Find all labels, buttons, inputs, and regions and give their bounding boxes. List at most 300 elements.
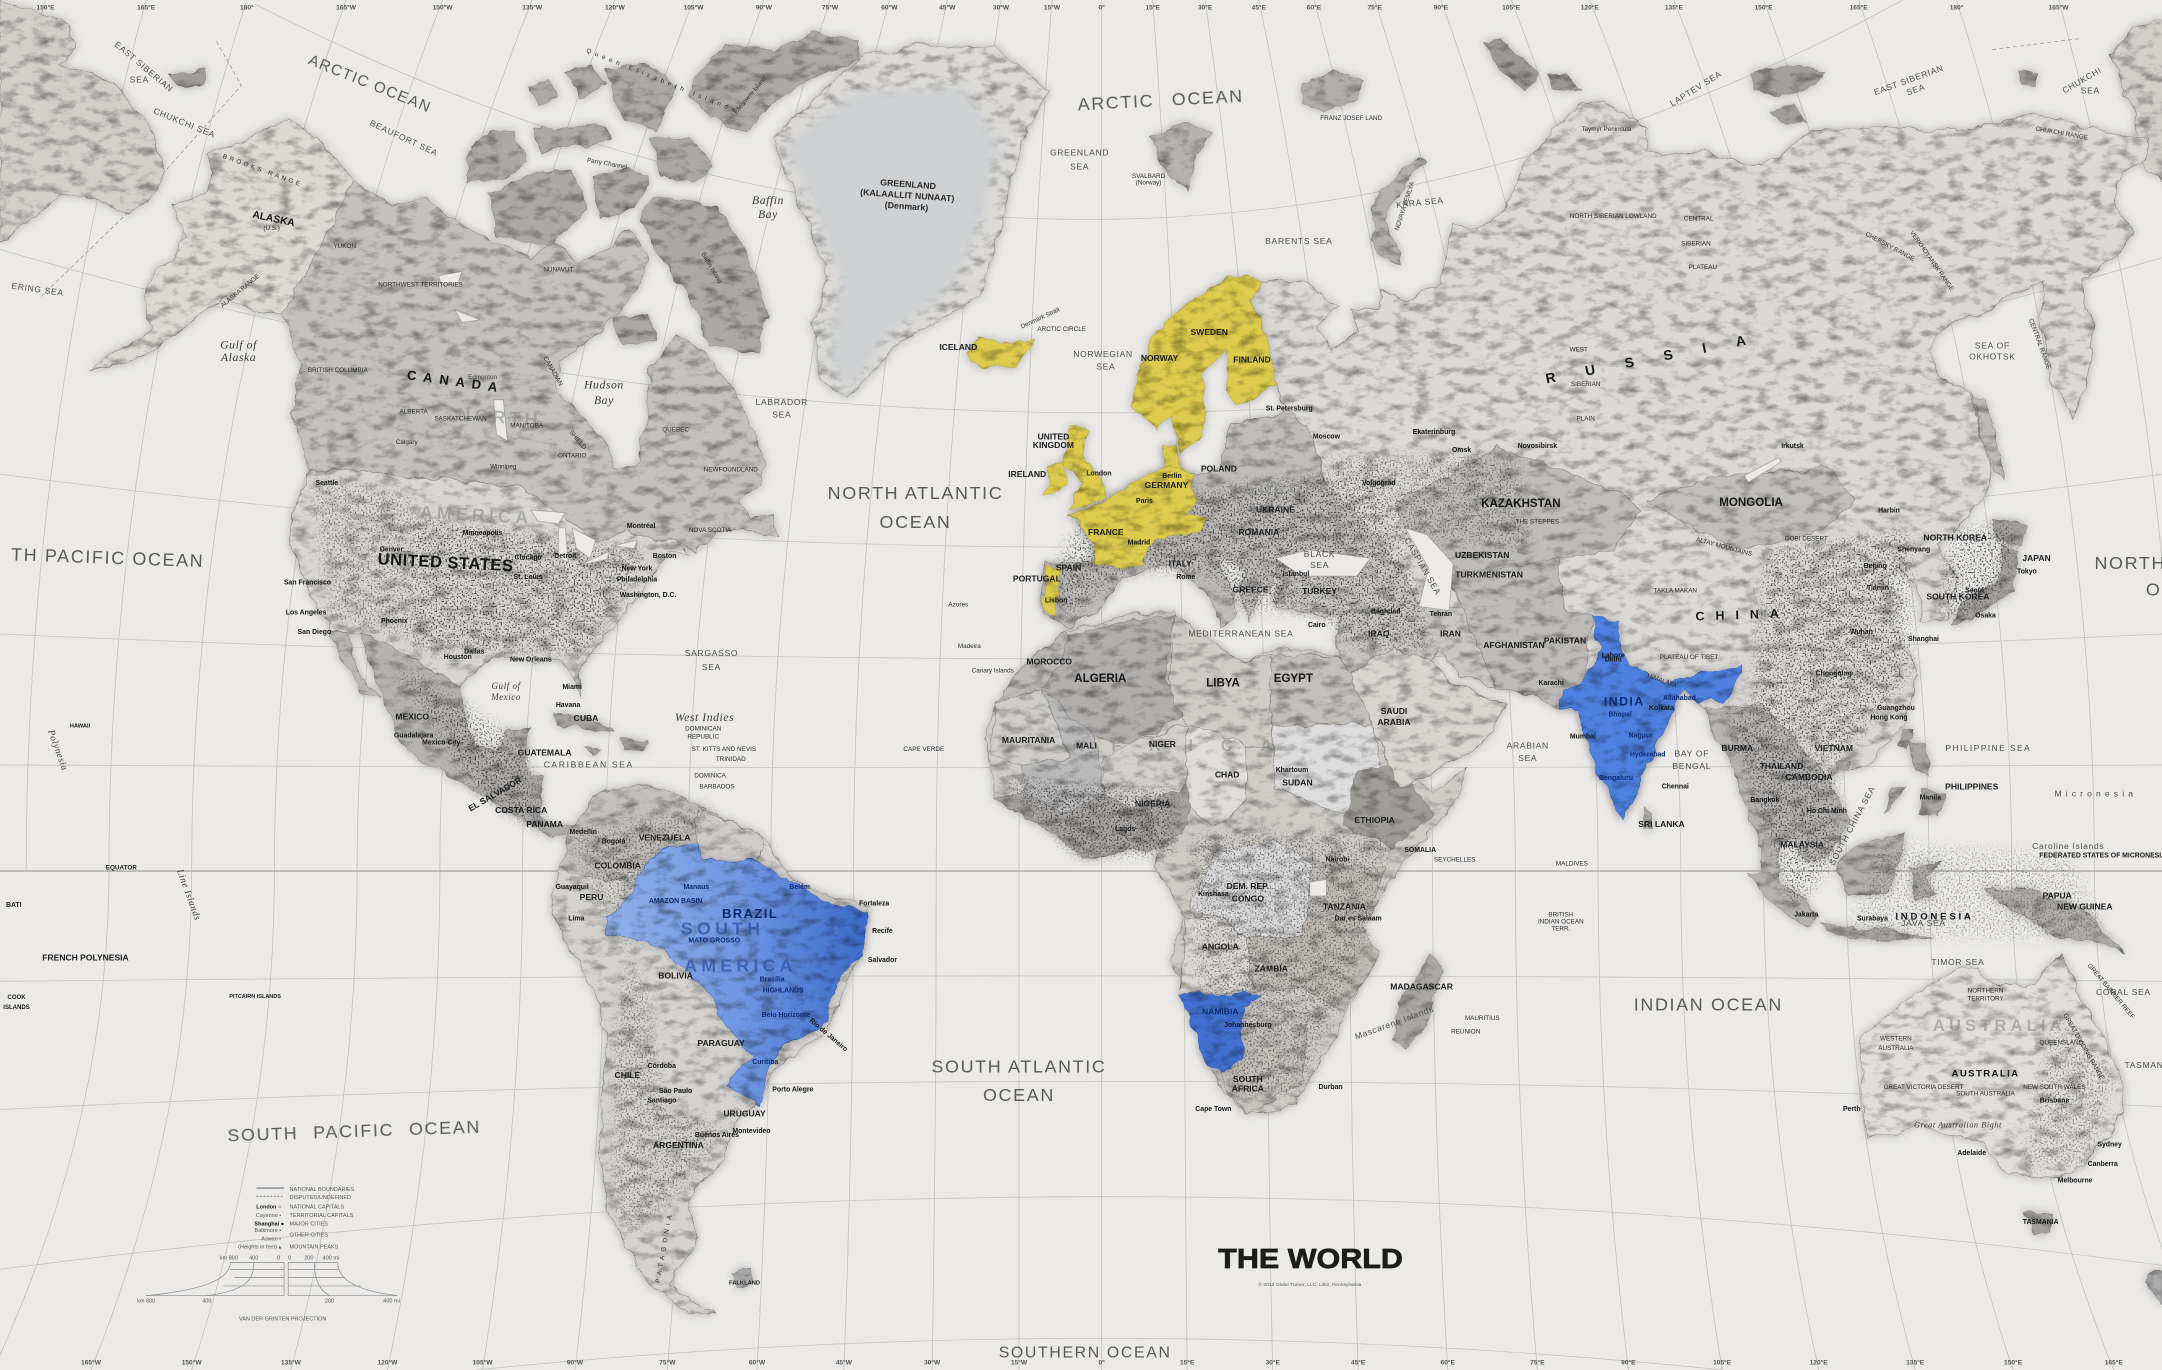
copyright: © 2012 Globe Turner, LLC, Lititz, Pennsylvania xyxy=(1258,1281,1362,1288)
country labels: FINLAND xyxy=(1233,354,1271,364)
city and regional labels: Kolkata xyxy=(1649,705,1674,712)
Black Sea xyxy=(1275,550,1371,576)
Somerset and Prince of Wales xyxy=(593,168,648,221)
country labels: NORWAY xyxy=(1141,353,1179,363)
country labels: COLOMBIA xyxy=(594,860,641,870)
top longitude labels: 15°W xyxy=(1044,4,1061,12)
city and regional labels: WESTERN xyxy=(1880,1036,1912,1043)
West Africa xyxy=(993,786,1189,860)
city and regional labels: Tianjin xyxy=(1867,585,1889,592)
Tasmania xyxy=(2027,1213,2054,1235)
Banks Island xyxy=(466,131,527,182)
city and regional labels: London xyxy=(1086,471,1112,478)
city and regional labels: Chennai xyxy=(1662,783,1689,790)
bottom longitude labels: 0° xyxy=(1099,1358,1105,1366)
bottom longitude labels: 75°W xyxy=(659,1358,676,1366)
city and regional labels: Rome xyxy=(1176,574,1196,581)
bottom longitude labels: 150°W xyxy=(182,1358,202,1366)
country labels: MEXICO xyxy=(395,711,429,721)
city and regional labels: AUSTRALIA xyxy=(1878,1045,1914,1052)
city and regional labels: Wuhan xyxy=(1850,629,1873,636)
continent ghost labels: SOUTH xyxy=(681,918,764,938)
top longitude labels: 60°W xyxy=(881,4,898,12)
city and regional labels: Perth xyxy=(1843,1106,1861,1113)
Greenland label: (Denmark) xyxy=(884,200,929,213)
city and regional labels: Salvador xyxy=(868,957,897,964)
Southeast Asia xyxy=(1703,703,1850,926)
city and regional labels: Ekaterinburg xyxy=(1413,429,1455,436)
ocean labels: O xyxy=(2146,579,2162,599)
continent ghost labels xyxy=(419,404,2066,1035)
bottom longitude labels: 120°W xyxy=(377,1358,398,1366)
legend entries: (Heights in feet) ▴ xyxy=(238,1245,282,1251)
legend entries: MOUNTAIN PEAKS xyxy=(290,1245,339,1251)
city and regional labels: Baffin Island xyxy=(700,251,723,285)
city and regional labels: Moscow xyxy=(1313,433,1341,440)
city and regional labels: HIMALAYA xyxy=(1646,672,1679,690)
country labels: HAWAII xyxy=(70,724,91,730)
city and regional labels: Mexico City xyxy=(422,739,461,746)
top longitude labels: 150°W xyxy=(433,4,453,12)
country labels: SUDAN xyxy=(1282,778,1313,788)
city and regional labels: Bengaluru xyxy=(1599,775,1633,782)
Chad xyxy=(1186,724,1248,827)
country labels: ROMANIA xyxy=(1238,527,1279,537)
Canada xyxy=(283,183,779,554)
country labels: (U.S.) xyxy=(263,225,280,232)
France, Germany, Benelux, Austria xyxy=(1069,463,1211,568)
Sumatra xyxy=(1750,874,1820,926)
Sulawesi xyxy=(1908,861,1944,899)
city and regional labels: Chicago xyxy=(515,555,542,562)
city and regional labels: Montevideo xyxy=(732,1128,771,1135)
Denmark xyxy=(1162,444,1180,469)
city and regional labels: Medellín xyxy=(569,829,597,836)
city and regional labels: Chongqing xyxy=(1816,670,1852,677)
country labels: THAILAND xyxy=(1760,761,1803,771)
country labels: NIGERIA xyxy=(1135,798,1170,808)
city and regional labels: HIGHLANDS xyxy=(763,987,804,994)
seas and bays: BAY OF xyxy=(1674,749,1709,759)
city and regional labels: ST. KITTS AND NEVIS xyxy=(692,746,756,753)
city and regional labels: PLAIN xyxy=(1577,415,1595,422)
country labels: IRAN xyxy=(1440,629,1461,639)
seas and bays: CORAL SEA xyxy=(2096,987,2151,997)
scale chart xyxy=(146,1262,397,1296)
title: THE WORLD xyxy=(1218,1243,1403,1274)
country labels: IRAQ xyxy=(1368,629,1390,639)
country labels: BATI xyxy=(6,902,22,909)
city and regional labels: GREAT VICTORIA DESERT xyxy=(1884,1084,1963,1091)
Scandinavia: Norway, Sweden, Finland xyxy=(1132,276,1277,453)
Queen Elizabeth Islands xyxy=(527,62,714,182)
city and regional labels: FRANZ JOSEF LAND xyxy=(1320,115,1383,122)
city and regional labels: CHERSKY RANGE xyxy=(1864,231,1916,263)
city and regional labels: Novosibirsk xyxy=(1518,443,1557,450)
scale labels xyxy=(137,1256,400,1322)
bottom longitude labels xyxy=(81,1358,2123,1366)
country labels: ALASKA xyxy=(251,210,296,229)
South Africa xyxy=(1219,1013,1310,1116)
city and regional labels: MATO GROSSO xyxy=(688,938,741,945)
city and regional labels: SASKATCHEWAN xyxy=(434,415,487,422)
scale labels: 400 xyxy=(249,1256,258,1262)
city and regional labels: Melbourne xyxy=(2058,1178,2093,1185)
city and regional labels: Fortaleza xyxy=(859,901,889,908)
city and regional labels: Tokyo xyxy=(2017,568,2037,575)
city and regional labels: Dar es Salaam xyxy=(1335,916,1382,923)
city and regional labels: ALTAY MOUNTAINS xyxy=(1695,536,1753,558)
city and regional labels: SOUTH AUSTRALIA xyxy=(1956,1091,2016,1098)
legend entries: Shanghai ● xyxy=(254,1221,284,1227)
scale labels: km 800 xyxy=(137,1298,155,1304)
highlighted countries: yellow group xyxy=(967,276,1277,615)
country labels: MADAGASCAR xyxy=(1390,982,1453,992)
city and regional labels: Manaus xyxy=(684,884,709,891)
country labels: JAPAN xyxy=(2022,553,2051,563)
city and regional labels: Nagpur xyxy=(1629,732,1653,739)
country labels: TURKMENISTAN xyxy=(1455,569,1523,579)
Japan xyxy=(1951,517,2027,623)
country labels: TANZANIA xyxy=(1323,902,1366,912)
city and regional labels: Delhi xyxy=(1605,657,1622,664)
city and regional labels: Khartoum xyxy=(1276,767,1308,774)
city and regional labels: ARCTIC CIRCLE xyxy=(1037,326,1086,333)
seas and bays: GREENLAND xyxy=(1050,148,1109,158)
scale labels: 400 mi xyxy=(323,1256,339,1262)
city and regional labels: Surabaya xyxy=(1857,916,1888,923)
city and regional labels: Ellesmere Island xyxy=(733,75,768,116)
city and regional labels: Detroit xyxy=(554,553,577,560)
city and regional labels: Winnipeg xyxy=(490,464,517,471)
city and regional labels: Montréal xyxy=(627,523,656,530)
country labels: SOMALIA xyxy=(1404,847,1436,854)
seas and bays: Line Islands xyxy=(174,867,203,922)
Greenland coast xyxy=(772,44,1048,400)
Greenland label xyxy=(859,176,956,215)
seas and bays: LAPTEV SEA xyxy=(1668,69,1723,108)
Mongolia xyxy=(1648,469,1855,549)
top longitude labels: 165°W xyxy=(336,4,357,12)
city and regional labels: Shenyang xyxy=(1897,546,1930,553)
top longitude labels: 120°E xyxy=(1581,4,1599,12)
Mexico xyxy=(361,637,531,788)
city and regional labels: Karachi xyxy=(1539,680,1564,687)
city and regional labels: Madrid xyxy=(1128,539,1150,546)
India xyxy=(1558,616,1744,823)
Falkland Islands xyxy=(731,1271,756,1286)
city and regional labels: Harbin xyxy=(1878,508,1900,515)
city and regional labels: ALBERTA xyxy=(400,408,429,415)
city and regional labels: New Orleans xyxy=(510,657,552,664)
legend entries: OTHER CITIES xyxy=(290,1232,328,1238)
country labels: NIGER xyxy=(1149,739,1176,749)
city and regional labels: INDIAN OCEAN xyxy=(1538,918,1584,925)
country labels: NEW GUINEA xyxy=(2057,902,2113,912)
city and regional labels: YUKON xyxy=(333,243,356,250)
Ellesmere Island xyxy=(689,34,862,132)
seas and bays: KARA SEA xyxy=(1396,195,1444,210)
bottom longitude labels: 90°E xyxy=(1621,1358,1636,1366)
city and regional labels: Lahore xyxy=(1602,652,1625,659)
city and regional labels: TRINIDAD xyxy=(716,756,746,763)
Severnaya Zemlya xyxy=(1484,39,1580,94)
Ireland xyxy=(1044,462,1066,496)
country labels: ICELAND xyxy=(939,342,977,352)
bottom longitude labels: 15°W xyxy=(1011,1358,1028,1366)
continent ghost labels: AMERICA xyxy=(684,956,797,976)
city and regional labels: Guayaquil xyxy=(556,884,589,891)
city and regional labels: GREAT DIVIDING RANGE xyxy=(2061,1012,2105,1081)
seas and bays: Gulf of xyxy=(220,339,258,352)
Libya xyxy=(1169,613,1271,751)
country labels: BRAZIL xyxy=(722,906,778,921)
country labels: SOUTH xyxy=(1233,1074,1263,1084)
city and regional labels: Belém xyxy=(789,884,810,891)
city and regional labels: Lisbon xyxy=(1045,597,1067,604)
city and regional labels: Guadalajara xyxy=(394,732,434,739)
city and regional labels: QUÉBEC xyxy=(662,424,689,433)
Sakhalin xyxy=(1972,393,2005,482)
city and regional labels: Dallas xyxy=(464,648,485,655)
country labels: NAMIBIA xyxy=(1202,1006,1239,1016)
scale labels: km 800 xyxy=(220,1256,238,1262)
country labels: AUSTRALIA xyxy=(1951,1068,2020,1079)
city and regional labels: Córdoba xyxy=(648,1063,676,1070)
New Zealand edge xyxy=(2144,1261,2162,1309)
city and regional labels: Bogotá xyxy=(602,839,626,846)
seas and bays: SEA xyxy=(702,662,721,672)
country labels: KINGDOM xyxy=(1033,440,1074,450)
city and regional labels: Curitiba xyxy=(752,1059,778,1066)
Arctic Ocean west: ARCTIC OCEAN xyxy=(306,52,434,116)
country labels: MAURITANIA xyxy=(1002,735,1055,745)
city and regional labels: (Norway) xyxy=(1136,180,1161,187)
top longitude labels xyxy=(36,4,2069,12)
city and regional labels: San Diego xyxy=(298,629,331,636)
city and regional labels: ONTARIO xyxy=(558,453,586,460)
city and regional labels: Hyderabad xyxy=(1630,752,1665,759)
country labels: BOLIVIA xyxy=(658,971,693,981)
seas and bays: MALDIVES xyxy=(1556,861,1588,868)
city and regional labels: Azores xyxy=(948,601,968,608)
country labels: CUBA xyxy=(574,713,598,723)
city and regional labels: Brasília xyxy=(760,976,785,983)
seas and bays: SEA xyxy=(1310,560,1329,570)
continent ghost labels: NORTH xyxy=(457,404,542,430)
city and regional labels: NUNAVUT xyxy=(543,267,574,274)
city and regional labels xyxy=(219,47,2136,1283)
top longitude labels: 165°E xyxy=(1850,4,1868,12)
top longitude labels: 120°W xyxy=(605,4,626,12)
seas and bays: CARIBBEAN SEA xyxy=(544,760,634,770)
Baffin Island xyxy=(641,197,768,354)
seas and bays: Gulf of xyxy=(492,681,521,691)
Egypt xyxy=(1271,655,1375,726)
city and regional labels: Santiago xyxy=(647,1098,676,1105)
seas and bays: TIMOR SEA xyxy=(1931,957,1985,967)
continent ghost labels: AFRICA xyxy=(1072,736,1300,755)
Africa xyxy=(986,609,1467,1116)
legend entries: Baltimore ▪ xyxy=(255,1228,281,1234)
Chukotka at left edge xyxy=(0,0,165,240)
city and regional labels: San Francisco xyxy=(284,579,331,586)
country labels: VENEZUELA xyxy=(639,833,690,843)
city and regional labels: NOVA SCOTIA xyxy=(689,527,732,534)
city and regional labels: AMAZON BASIN xyxy=(649,898,702,905)
legend entries: Cayenne ▪ xyxy=(256,1213,281,1219)
city and regional labels: DOMINICAN xyxy=(685,725,722,732)
seas and bays: Bay xyxy=(758,208,778,221)
city and regional labels: CAPE VERDE xyxy=(903,746,944,753)
bottom longitude labels: 120°E xyxy=(1810,1358,1828,1366)
country labels: PAKISTAN xyxy=(1544,636,1586,646)
Angola xyxy=(1180,917,1255,992)
seas and bays: CASPIAN SEA xyxy=(1402,536,1443,597)
city and regional labels: NORTHERN xyxy=(1968,987,2004,994)
city and regional labels: Houston xyxy=(444,654,472,661)
city and regional labels: Cape Town xyxy=(1195,1106,1231,1113)
city and regional labels: Seoul xyxy=(1965,588,1984,595)
scale labels: 200 xyxy=(304,1256,313,1262)
scale labels: 400 xyxy=(202,1298,211,1304)
city and regional labels: TAKLA MAKAN xyxy=(1654,588,1697,595)
city and regional labels: Canberra xyxy=(2088,1161,2118,1168)
seas and bays: SEA OF xyxy=(1975,341,2010,351)
New Guinea xyxy=(1986,889,2123,951)
inland waters xyxy=(438,272,1781,896)
city and regional labels: MANITOBA xyxy=(510,422,544,429)
United States xyxy=(292,469,689,696)
city and regional labels: Miami xyxy=(562,684,582,691)
city and regional labels: PLATEAU xyxy=(1689,264,1717,271)
legend entries: NATIONAL BOUNDARIES xyxy=(290,1187,355,1193)
seas and bays: Bay xyxy=(594,394,614,407)
seas and bays: SEA xyxy=(1905,82,1926,97)
city and regional labels: Seattle xyxy=(316,480,338,487)
bottom longitude labels: 165°W xyxy=(81,1358,102,1366)
top longitude labels: 135°W xyxy=(522,4,543,12)
bottom longitude labels: 60°W xyxy=(749,1358,766,1366)
country labels: MOROCCO xyxy=(1027,656,1072,666)
seas and bays: ARABIAN xyxy=(1507,740,1549,750)
city and regional labels: Guangzhou xyxy=(1877,705,1915,712)
city and regional labels: REPUBLIC xyxy=(687,734,719,741)
city and regional labels: PATAGONIA xyxy=(655,1211,674,1283)
top longitude labels: 150°E xyxy=(36,4,55,12)
country labels: CHAD xyxy=(1215,769,1239,779)
city and regional labels: TERRITORY xyxy=(1967,996,2004,1003)
country labels: GUATEMALA xyxy=(518,747,572,757)
country labels: GREECE xyxy=(1233,585,1269,595)
country labels: VIETNAM xyxy=(1815,743,1853,753)
city and regional labels: Calgary xyxy=(396,439,418,446)
Democratic Republic of Congo xyxy=(1189,841,1310,937)
country labels: EL SALVADOR xyxy=(467,775,523,813)
country labels: EGYPT xyxy=(1274,673,1313,685)
Alaska corner at right edge xyxy=(2110,21,2162,186)
city and regional labels: SEYCHELLES xyxy=(1434,856,1475,863)
country labels: FRENCH POLYNESIA xyxy=(42,953,129,963)
top longitude labels: 30°E xyxy=(1198,4,1213,12)
city and regional labels: Johannesburg xyxy=(1224,1022,1272,1029)
city and regional labels: NOVAYA ZEMLYA xyxy=(1394,180,1416,231)
country labels: UNITED STATES xyxy=(377,549,514,575)
bottom longitude labels: 45°E xyxy=(1351,1358,1366,1366)
top longitude labels: 135°E xyxy=(1665,4,1684,12)
seas and bays: LABRADOR xyxy=(756,397,808,407)
Europe xyxy=(1041,411,1386,627)
Svalbard xyxy=(1150,123,1213,190)
city and regional labels: Denver xyxy=(380,546,404,553)
city and regional labels: Buenos Aires xyxy=(695,1132,739,1139)
country labels: FALKLAND xyxy=(729,1281,760,1287)
top longitude labels: 30°W xyxy=(993,4,1010,12)
city and regional labels: Manila xyxy=(1920,794,1941,801)
country labels: FRANCE xyxy=(1088,527,1124,537)
city and regional labels: Belo Horizonte xyxy=(762,1012,810,1019)
seas and bays: Hudson xyxy=(583,379,624,392)
country labels: COSTA RICA xyxy=(495,805,547,815)
country labels: SAUDI xyxy=(1381,706,1407,716)
city and regional labels: QUEENSLAND xyxy=(2040,1040,2084,1047)
seas and bays: Great Australian Bight xyxy=(1914,1120,2002,1129)
seas and bays: PHILIPPINE SEA xyxy=(1945,743,2031,753)
seas and bays: Mascarene Islands xyxy=(1353,1004,1435,1042)
city and regional labels: NEW SOUTH WALES xyxy=(2023,1084,2086,1091)
ocean labels: OCEAN xyxy=(880,512,952,532)
seas and bays: Polynesia xyxy=(45,727,70,772)
Wrangel Island xyxy=(168,69,2038,87)
country labels: KAZAKHSTAN xyxy=(1481,498,1561,510)
scale labels: VAN DER GRINTEN PROJECTION xyxy=(239,1316,326,1322)
Ethiopia xyxy=(1344,765,1434,848)
country labels: GERMANY xyxy=(1145,480,1189,490)
city and regional labels: THE STEPPES xyxy=(1516,519,1559,526)
country labels: PAPUA xyxy=(2043,891,2072,901)
bottom longitude labels: 15°E xyxy=(1180,1358,1195,1366)
Mali xyxy=(1020,689,1103,813)
top longitude labels: 0° xyxy=(1099,4,1105,12)
seas and bays: SEA xyxy=(772,410,791,420)
country labels: PHILIPPINES xyxy=(1945,782,1999,792)
city and regional labels: PLATEAU OF TIBET xyxy=(1660,654,1718,661)
seas and bays: BARENTS SEA xyxy=(1265,236,1333,246)
seas and bays: JAVA SEA xyxy=(1901,918,1946,928)
city and regional labels: BRITISH COLUMBIA xyxy=(308,367,368,374)
top longitude labels: 45°E xyxy=(1252,4,1267,12)
North Pacific Ocean: TH PACIFIC OCEAN xyxy=(11,544,205,571)
Java and Lesser Sunda xyxy=(1823,923,1933,940)
Greenland ice interior xyxy=(786,87,1000,393)
Namibia xyxy=(1180,992,1263,1074)
seas and bays: West Indies xyxy=(675,711,734,724)
city and regional labels: NEWFOUNDLAND xyxy=(704,466,758,473)
city and regional labels: Rio de Janeiro xyxy=(808,1017,849,1053)
seas and bays: EQUATOR xyxy=(106,865,137,872)
seas and bays xyxy=(11,39,2162,1129)
South Pacific Ocean: SOUTH PACIFIC OCEAN xyxy=(227,1117,481,1145)
Caspian Sea xyxy=(1405,528,1453,611)
city and regional labels: TASMANIA xyxy=(2023,1219,2059,1226)
Niger xyxy=(1103,724,1189,806)
United Kingdom xyxy=(1064,427,1106,507)
seas and bays: CHUKCHI SEA xyxy=(152,106,217,140)
country labels: DEM. REP. xyxy=(1227,881,1269,891)
country labels: MONGOLIA xyxy=(1719,497,1784,509)
city and regional labels: Canary Islands xyxy=(972,668,1014,675)
top longitude labels: 45°W xyxy=(939,4,956,12)
